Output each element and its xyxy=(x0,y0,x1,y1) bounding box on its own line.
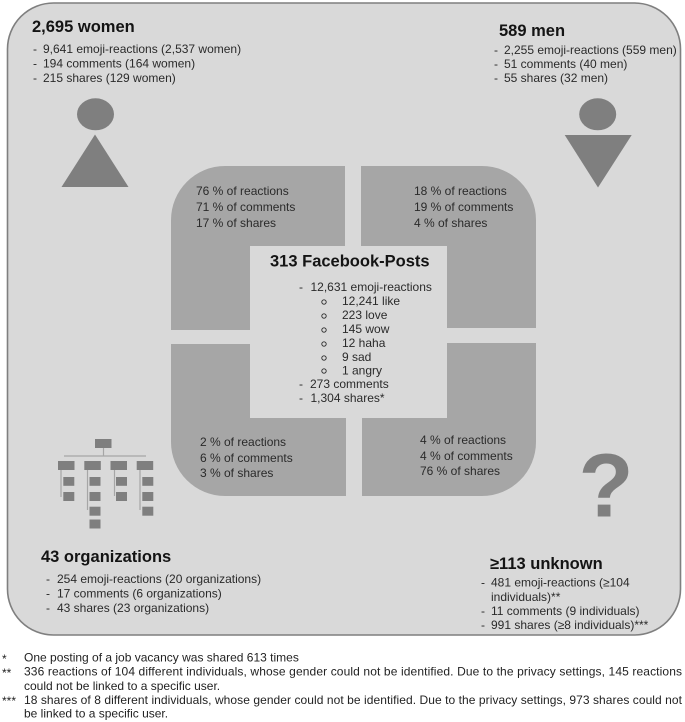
block: men: 589 men xyxy=(499,22,565,40)
quadrant: unknown: 76 % of shares xyxy=(420,464,500,478)
block: organizations: 17 comments (6 organizations) xyxy=(57,586,222,600)
block: organizations: - xyxy=(46,572,50,586)
quadrant: organizations: 2 % of reactions xyxy=(200,435,286,449)
block: unknown xyxy=(481,555,649,632)
block: organizations xyxy=(41,548,261,615)
icon: man xyxy=(565,98,632,188)
panel: centre Facebook posts xyxy=(250,246,447,418)
quadrant: women: 17 % of shares xyxy=(196,216,276,230)
block: unknown: 11 comments (9 individuals) xyxy=(491,604,640,618)
block: organizations: 254 emoji-reactions (20 organizations) xyxy=(57,572,261,586)
quadrant: women: 71 % of comments xyxy=(196,200,295,214)
quadrant: unknown xyxy=(362,343,536,496)
footnotes: 336 reactions of 104 different individuals, whose gender could not be identified. Due to the privacy settings, 145 reactions xyxy=(24,665,682,679)
block: women: 2,695 women xyxy=(32,18,135,36)
centre list: - xyxy=(299,377,303,391)
footnotes: ** xyxy=(2,666,12,680)
footnotes: be linked to a specific user. xyxy=(24,706,168,720)
centre list: 273 comments xyxy=(310,377,389,391)
block: men xyxy=(494,22,677,85)
block: women xyxy=(32,18,241,85)
block: men: 2,255 emoji-reactions (559 men) xyxy=(504,43,677,57)
centre list: 145 wow xyxy=(342,322,390,336)
footnotes: * xyxy=(2,652,7,666)
centre list: - xyxy=(299,280,303,294)
block: women: - xyxy=(33,56,37,70)
block: organizations: - xyxy=(46,601,50,615)
block: men: - xyxy=(494,71,498,85)
centre list: 12,241 like xyxy=(342,294,400,308)
icon: question mark: ? xyxy=(579,436,633,536)
centre list: 223 love xyxy=(342,308,388,322)
quadrant: organizations: 6 % of comments xyxy=(200,451,293,465)
block: women: 9,641 emoji-reactions (2,537 women) xyxy=(43,42,241,56)
footnotes xyxy=(2,651,683,720)
block: men: - xyxy=(494,43,498,57)
icon: organization chart xyxy=(58,439,153,528)
quadrant: men xyxy=(361,166,536,328)
icon: woman xyxy=(62,98,128,187)
quadrant: women xyxy=(171,166,345,330)
block: women: 215 shares (129 women) xyxy=(43,71,176,85)
quadrant: women: 76 % of reactions xyxy=(196,184,289,198)
block: unknown: 991 shares (≥8 individuals)*** xyxy=(491,618,649,632)
quadrant: men: 19 % of comments xyxy=(414,200,513,214)
centre list: 1 angry xyxy=(342,364,382,378)
block: organizations: 43 shares (23 organizations) xyxy=(57,601,209,615)
block: women: - xyxy=(33,71,37,85)
footnotes: 18 shares of 8 different individuals, whose gender could not be identified. Due to the privacy settings, 973 shares could not xyxy=(24,693,683,707)
footnotes: *** xyxy=(2,694,16,708)
block: men: 55 shares (32 men) xyxy=(504,71,608,85)
centre list: 9 sad xyxy=(342,350,371,364)
centre list: 12 haha xyxy=(342,336,386,350)
block: women: - xyxy=(33,42,37,56)
quadrant: organizations xyxy=(171,344,346,496)
centre list: 12,631 emoji-reactions xyxy=(310,280,432,294)
block: organizations: - xyxy=(46,586,50,600)
block: men: 51 comments (40 men) xyxy=(504,57,627,71)
block: unknown: 481 emoji-reactions (≥104 xyxy=(491,576,630,590)
centre list xyxy=(299,280,432,405)
block: unknown: - xyxy=(481,604,485,618)
block: organizations: 43 organizations xyxy=(41,548,171,566)
centre heading: 313 Facebook-Posts xyxy=(270,252,430,270)
centre list: 1,304 shares* xyxy=(310,391,385,405)
quadrant: men: 4 % of shares xyxy=(414,216,487,230)
footnotes: could not be linked to a specific user. xyxy=(24,679,220,693)
footnotes: One posting of a job vacancy was shared 613 times xyxy=(24,651,299,665)
block: women: 194 comments (164 women) xyxy=(43,56,195,70)
quadrant: men: 18 % of reactions xyxy=(414,184,507,198)
block: unknown: - xyxy=(481,618,485,632)
quadrant: unknown: 4 % of comments xyxy=(420,449,513,463)
block: men: - xyxy=(494,57,498,71)
block: unknown: - xyxy=(481,576,485,590)
quadrant: unknown: 4 % of reactions xyxy=(420,433,506,447)
centre list: - xyxy=(299,391,303,405)
block: unknown: individuals)** xyxy=(491,590,561,604)
block: unknown: ≥113 unknown xyxy=(490,555,603,573)
quadrant: organizations: 3 % of shares xyxy=(200,466,273,480)
